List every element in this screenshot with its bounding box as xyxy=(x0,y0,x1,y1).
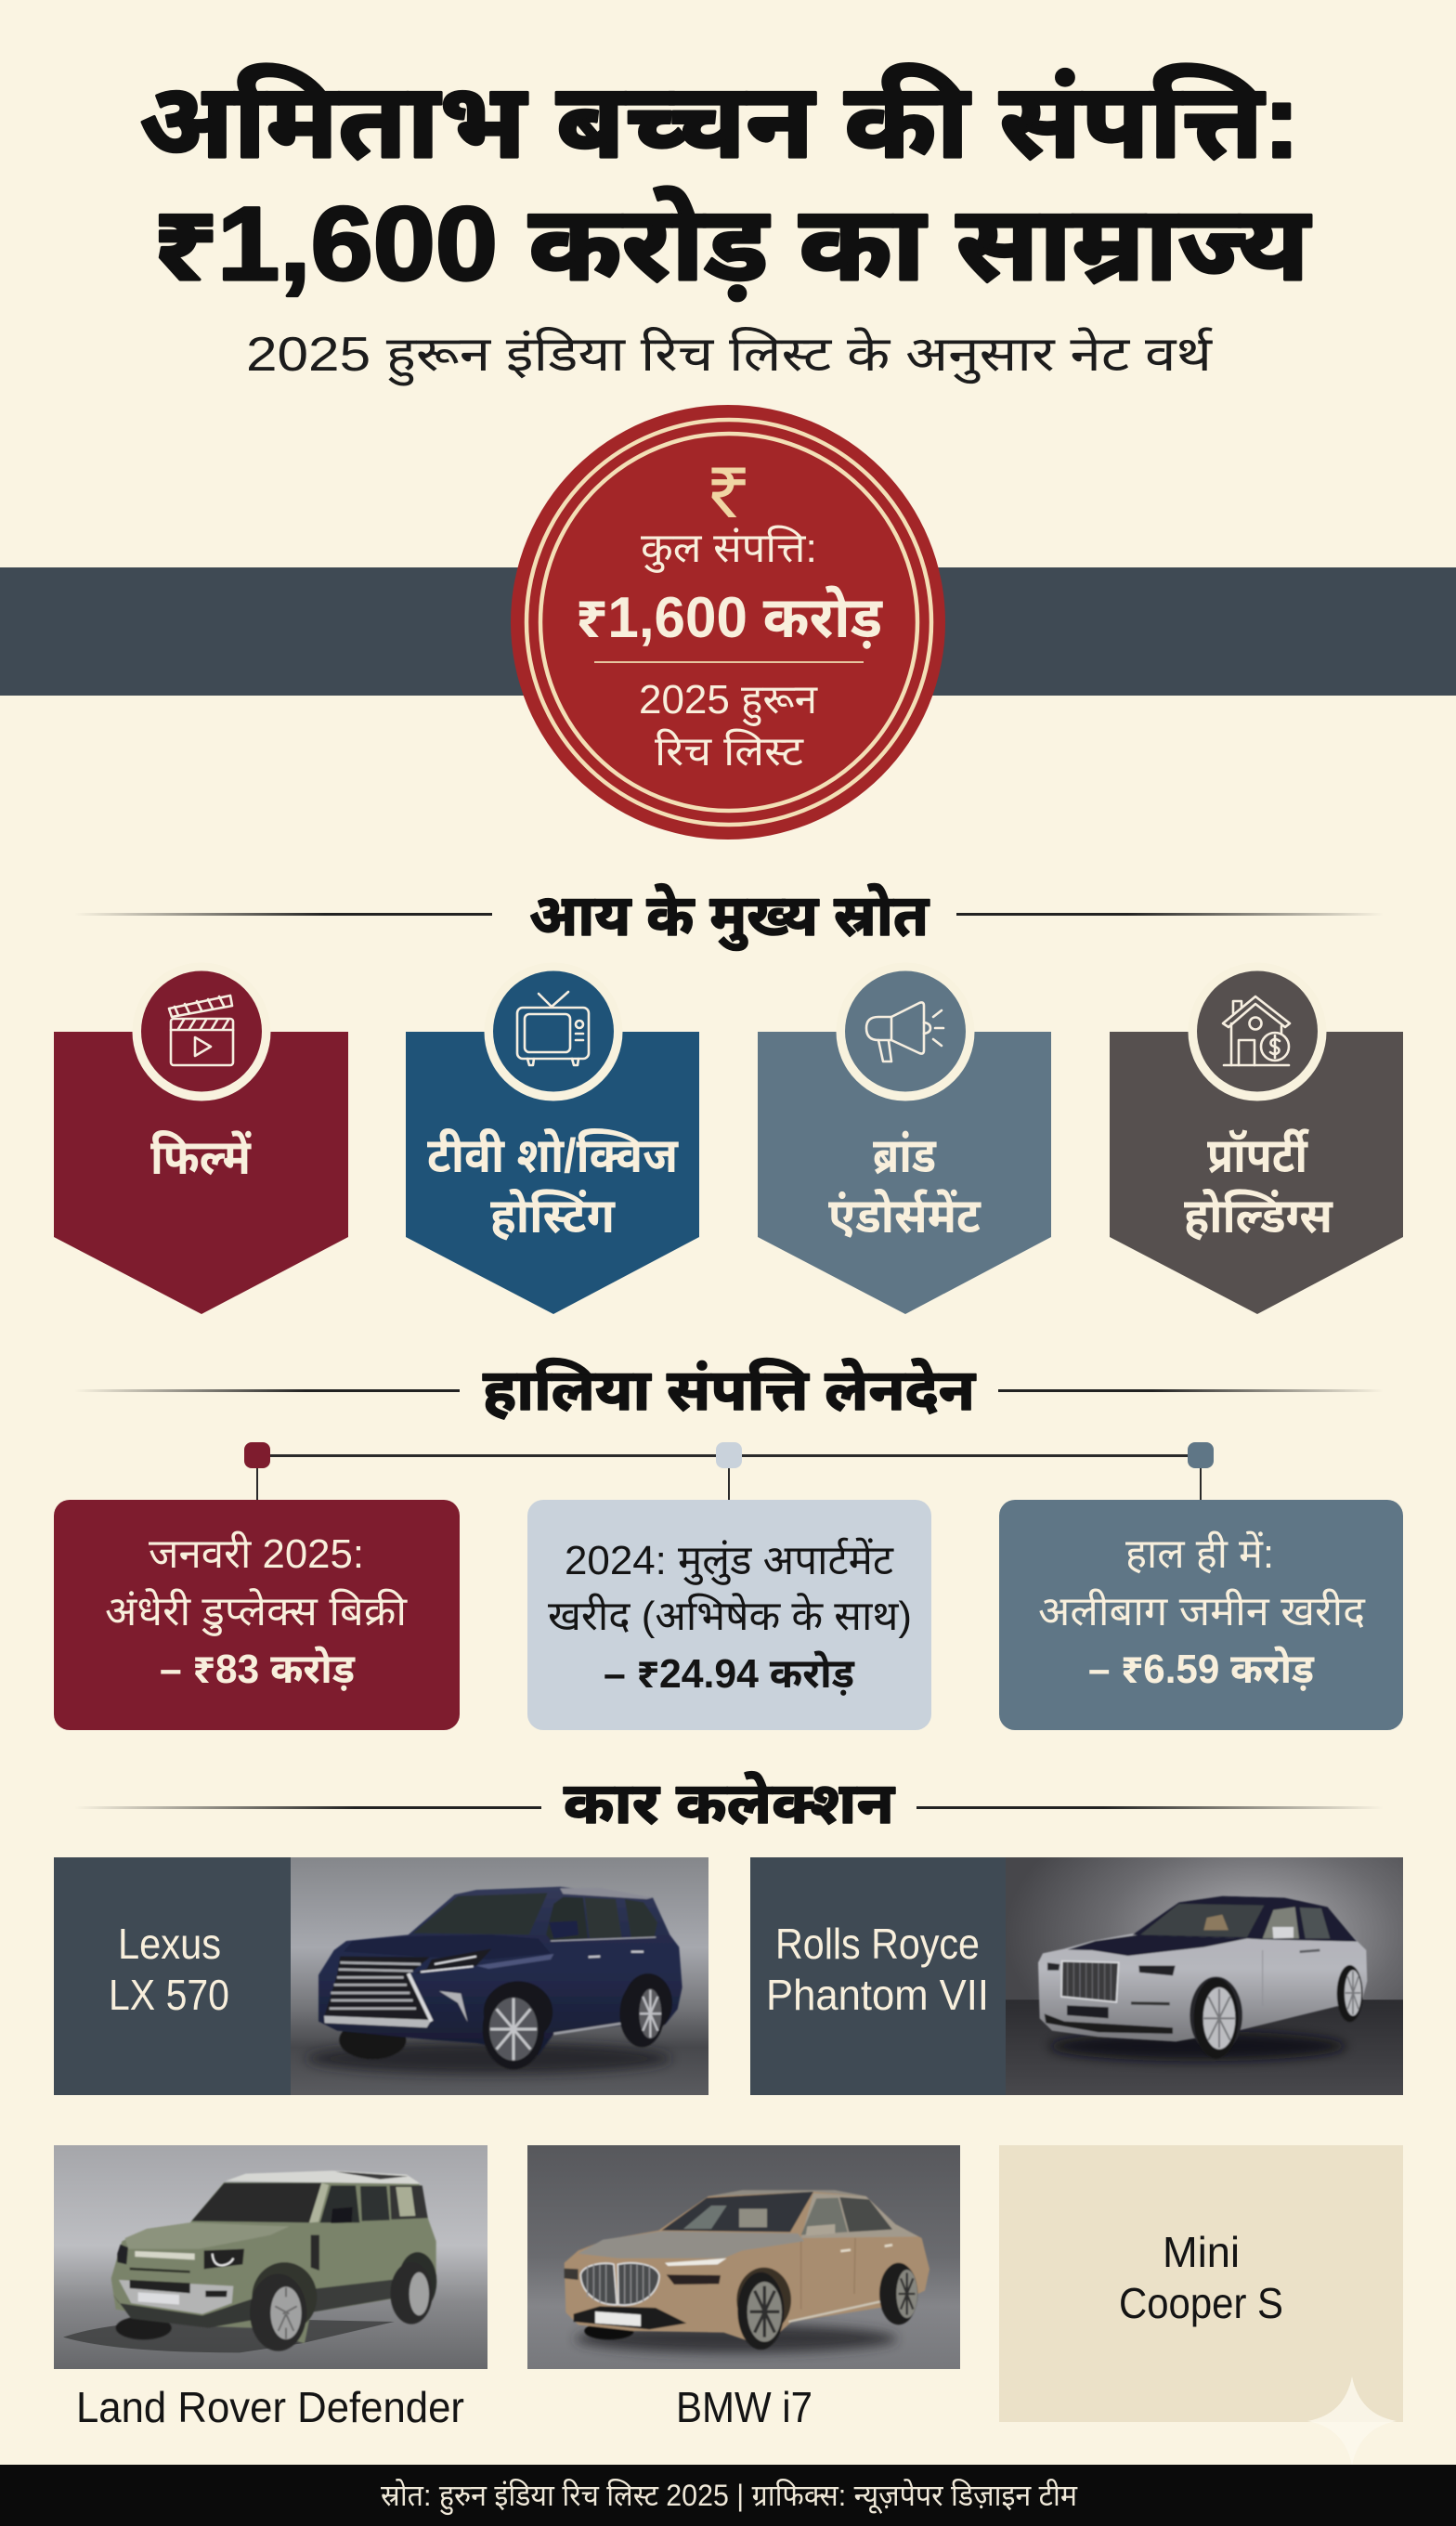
label: property holdings: होल्डिंग्स xyxy=(1184,1189,1334,1243)
label: brand endorsement xyxy=(828,1129,982,1243)
section heading: income xyxy=(74,882,1384,951)
car image: Defender xyxy=(54,2145,488,2369)
label: property holdings xyxy=(1184,1128,1334,1243)
timeline xyxy=(244,1442,1214,1500)
label: property holdings: प्रॉपर्टी xyxy=(1207,1128,1309,1183)
footer xyxy=(0,2465,1456,2526)
label: tv hosting xyxy=(427,1129,679,1243)
seal amount: ₹1,600 करोड़ xyxy=(576,585,884,650)
subtitle: 2025 हुरून इंडिया रिच लिस्ट के अनुसार नेट वर्थ xyxy=(246,327,1213,386)
panel: tv hosting xyxy=(406,962,699,1314)
card: Mulund apartment purchase: 2024: मुलुंड अपार्टमेंट xyxy=(565,1537,894,1586)
title xyxy=(139,63,1311,302)
sparkle xyxy=(1307,2376,1397,2466)
panel: property holdings xyxy=(1110,962,1403,1314)
car card: Mini Cooper S: Cooper S xyxy=(1119,2279,1283,2327)
icon: television xyxy=(517,992,589,1065)
rupee symbol: ₹ xyxy=(706,446,750,535)
card: Andheri duplex sale: जनवरी 2025: xyxy=(149,1530,364,1577)
panel: films xyxy=(54,962,348,1314)
card: Andheri duplex sale: अंधेरी डुप्लेक्स बिक्री xyxy=(105,1587,409,1637)
section heading: income: आय के मुख्य स्रोत xyxy=(529,882,930,951)
icon: house with dollar xyxy=(1223,996,1290,1065)
card: Mulund apartment purchase: खरीद (अभिषेक के साथ) xyxy=(548,1592,912,1639)
card: Mulund apartment purchase xyxy=(527,1500,931,1730)
icon: megaphone xyxy=(866,1002,943,1061)
car card: Mini Cooper S xyxy=(999,2145,1403,2422)
label: brand endorsement: एंडोर्समेंट xyxy=(828,1189,982,1243)
card: Andheri duplex sale: – ₹83 करोड़ xyxy=(160,1646,356,1692)
label: BMW i7: BMW i7 xyxy=(676,2383,812,2431)
seal label: कुल संपत्ति: xyxy=(641,525,817,574)
panel: brand endorsement xyxy=(758,962,1051,1314)
seal source xyxy=(639,677,819,775)
seal source: 2025 हुरून xyxy=(639,677,819,726)
icon: clapperboard xyxy=(169,996,233,1065)
section heading: cars xyxy=(74,1770,1384,1836)
card: Alibaug land purchase: – ₹6.59 करोड़ xyxy=(1088,1646,1315,1692)
car card: Land Rover Defender xyxy=(54,2145,488,2431)
car image: Rolls Royce xyxy=(1006,1857,1403,2095)
card: Alibaug land purchase xyxy=(999,1500,1403,1730)
label: tv hosting: टीवी शो/क्विज xyxy=(427,1129,679,1183)
title: अमिताभ बच्चन की संपत्ति: xyxy=(139,63,1300,179)
card: Alibaug land purchase: अलीबाग जमीन खरीद xyxy=(1038,1588,1366,1634)
car card: Rolls Royce Phantom VII xyxy=(750,1857,1403,2095)
car card: Lexus LX 570: LX 570 xyxy=(109,1971,229,2019)
net worth seal xyxy=(511,405,945,840)
car card: Lexus LX 570 xyxy=(54,1857,708,2095)
label: tv hosting: होस्टिंग xyxy=(490,1189,616,1243)
card: Mulund apartment purchase: – ₹24.94 करोड़ xyxy=(604,1650,855,1697)
label: brand endorsement: ब्रांड xyxy=(873,1129,937,1183)
card: Andheri duplex sale xyxy=(54,1500,460,1730)
footer: स्रोत: हुरुन इंडिया रिच लिस्ट 2025 | ग्राफिक्स: न्यूज़पेपर डिज़ाइन टीम xyxy=(381,2479,1078,2516)
card: Alibaug land purchase: हाल ही में: xyxy=(1125,1530,1274,1577)
car card: Lexus LX 570: Lexus xyxy=(118,1920,221,1968)
car image: Lexus xyxy=(291,1857,708,2095)
title: ₹1,600 करोड़ का साम्राज्य xyxy=(153,186,1311,302)
section heading: transactions: हालिया संपत्ति लेनदेन xyxy=(483,1357,977,1423)
dark band xyxy=(0,567,1456,696)
car card: Mini Cooper S: Mini xyxy=(1163,2228,1240,2276)
section heading: transactions xyxy=(74,1357,1384,1423)
section heading: cars: कार कलेक्शन xyxy=(564,1770,896,1836)
car image: BMW xyxy=(527,2145,960,2369)
car card: BMW i7 xyxy=(527,2145,960,2431)
car card: Rolls Royce Phantom VII: Phantom VII xyxy=(766,1971,989,2019)
label: Land Rover Defender: Land Rover Defender xyxy=(76,2383,464,2431)
car card: Rolls Royce Phantom VII: Rolls Royce xyxy=(775,1920,980,1968)
seal source: रिच लिस्ट xyxy=(655,728,804,775)
label: films: फिल्में xyxy=(150,1130,252,1185)
